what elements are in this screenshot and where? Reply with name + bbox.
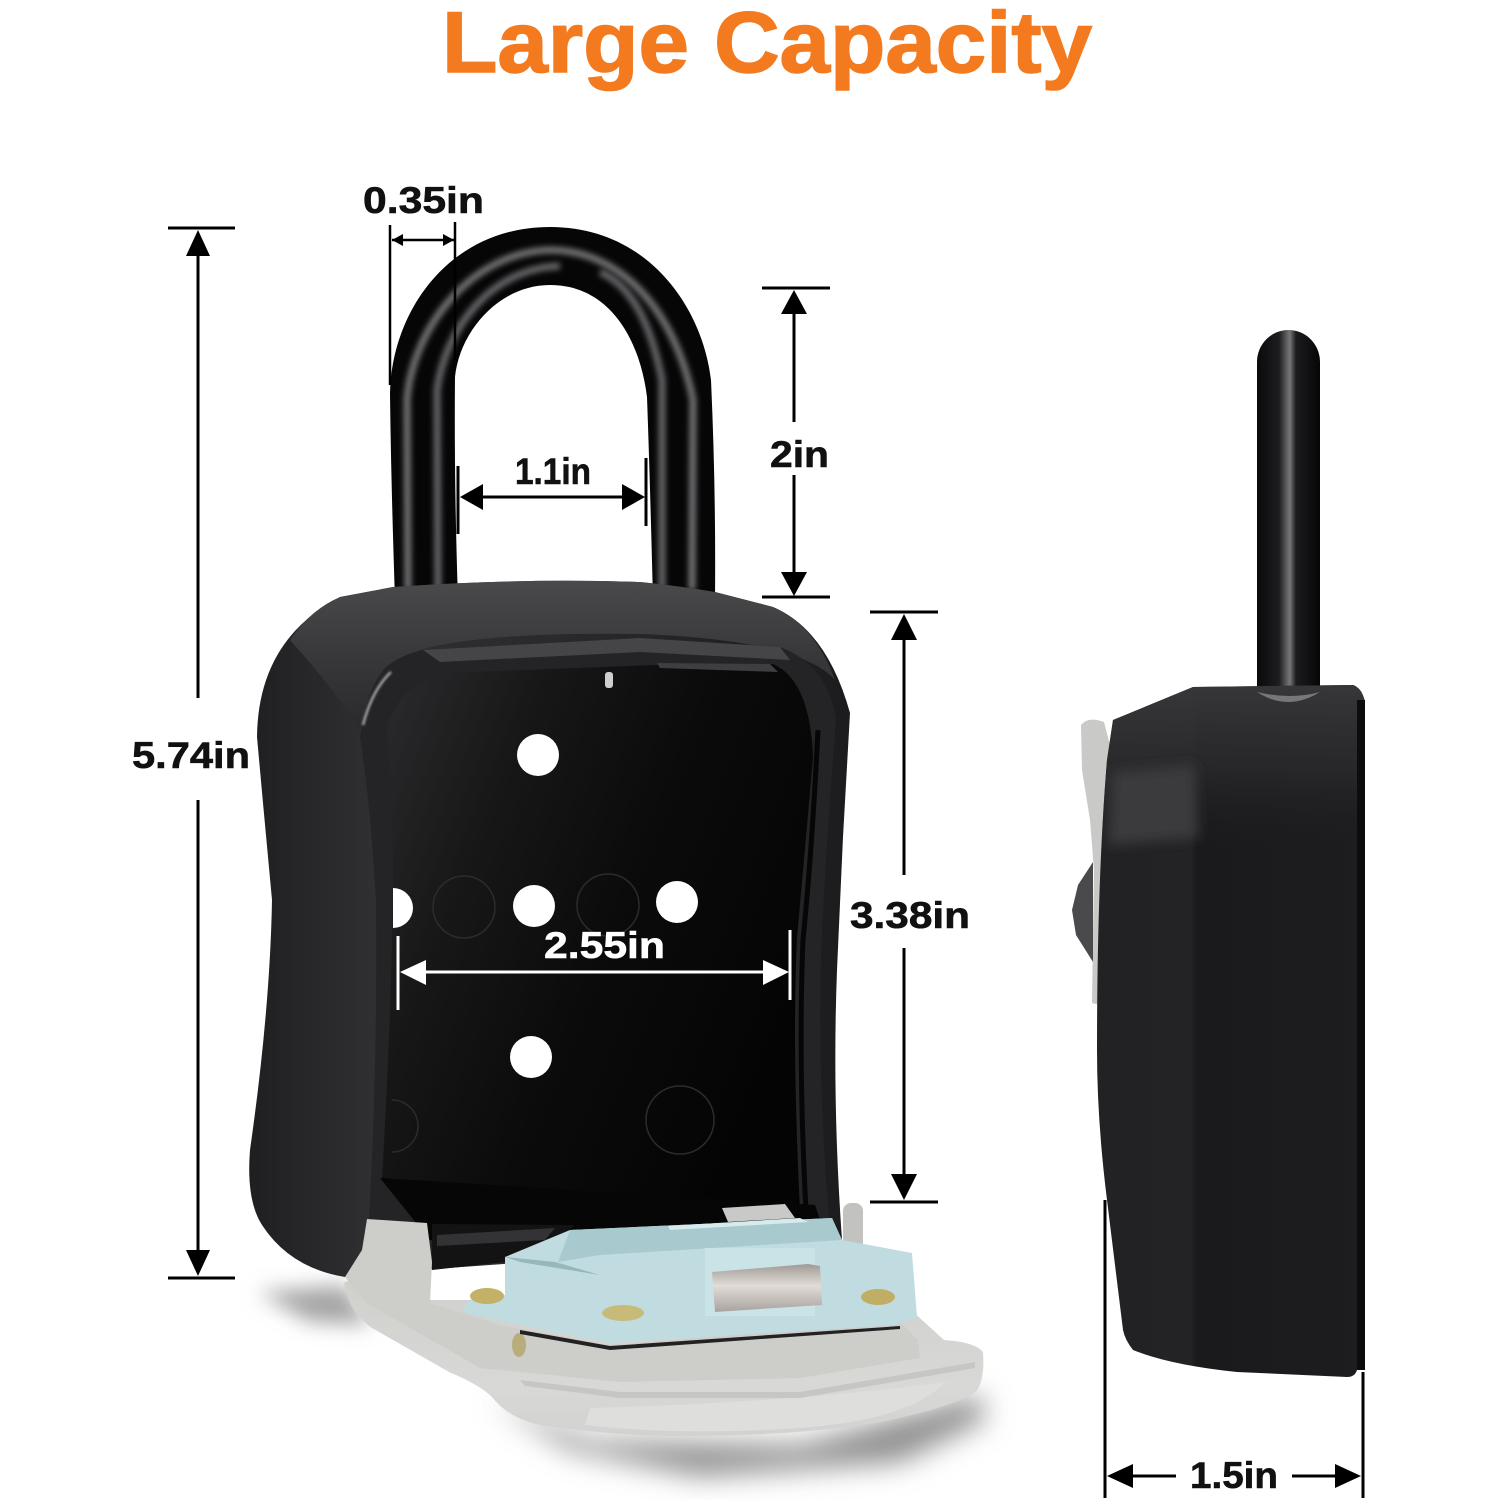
- plate shadow bottom: [490, 1395, 985, 1476]
- screw right: [861, 1289, 895, 1305]
- knockout dimples: [392, 874, 714, 1154]
- dimension: interior width 2.55in: [398, 925, 790, 1010]
- top latch tab right: [657, 663, 778, 672]
- dimension: shackle thickness 0.35in: [363, 180, 484, 385]
- body left highlight: [1108, 765, 1198, 845]
- illustration: side view of lock box: [1072, 330, 1365, 1377]
- plate ridge shade: [520, 1362, 975, 1398]
- shackle highlights: [407, 250, 693, 590]
- roller bolt: [712, 1264, 822, 1312]
- dimension: overall height 5.74in: 5.74in: [132, 735, 250, 776]
- keypad module: [463, 1218, 917, 1343]
- bar speckle highlight: [437, 1228, 555, 1246]
- dimension: overall height 5.74in: [132, 228, 250, 1278]
- shackle inner highlights: [437, 266, 662, 590]
- plate raised base: [366, 1303, 920, 1382]
- side body: [1097, 685, 1365, 1377]
- small side screw: [512, 1333, 526, 1357]
- illustration: open lock box front view: [249, 227, 985, 1476]
- gap under module: [520, 1326, 900, 1350]
- shackle: [390, 227, 715, 600]
- body top fade: [1102, 685, 1364, 830]
- plate shadow left: [258, 1285, 370, 1325]
- body outer shell: [249, 581, 850, 1277]
- dimension: depth 1.5in: [1105, 1200, 1363, 1498]
- module top face: [558, 1218, 842, 1262]
- dimension: depth 1.5in: 1.5in: [1190, 1455, 1278, 1496]
- body top band: [290, 581, 835, 730]
- dimension: shackle clearance 1.1in: 1.1in: [515, 451, 591, 492]
- light tab behind keypad: [722, 1204, 795, 1222]
- hinge arm: [345, 1219, 432, 1303]
- plate base: [344, 1270, 983, 1436]
- side lid: [1081, 720, 1110, 1005]
- side dial: [1072, 862, 1093, 962]
- dimension: interior height 3.38in: 3.38in: [850, 895, 970, 936]
- shackle collar: [1257, 692, 1320, 702]
- bottom ledge: [380, 1178, 822, 1240]
- small metal tab: [605, 672, 613, 688]
- right wall dark groove: [801, 730, 818, 1210]
- plate crescent highlight: [585, 1382, 945, 1431]
- illustration: hinged keypad plate: [344, 1203, 983, 1436]
- dimension: interior height 3.38in: [850, 612, 970, 1202]
- dimension: shackle thickness 0.35in: 0.35in: [363, 180, 484, 221]
- dimension: shackle height 2in: 2in: [770, 434, 829, 475]
- dark bar behind keypad: [432, 1224, 575, 1270]
- rim highlight arc: [363, 672, 391, 725]
- top rim speckle strip: [423, 638, 790, 662]
- dimension: shackle clearance 1.1in: [458, 451, 646, 534]
- screw front: [602, 1305, 644, 1321]
- module step shadow: [505, 1257, 600, 1275]
- dimension: shackle height 2in: [762, 288, 830, 597]
- side shackle: [1257, 330, 1320, 700]
- keypad buttons: [668, 1218, 808, 1230]
- body inner rim: [360, 638, 836, 1278]
- module center recess: [705, 1248, 815, 1316]
- metal wheel: [843, 1203, 863, 1253]
- screw left rear: [470, 1288, 504, 1304]
- dimension: interior width 2.55in: 2.55in: [544, 925, 665, 966]
- body right edge: [1357, 700, 1365, 1370]
- interior cavity: [380, 663, 822, 1240]
- mounting holes: [393, 734, 698, 1078]
